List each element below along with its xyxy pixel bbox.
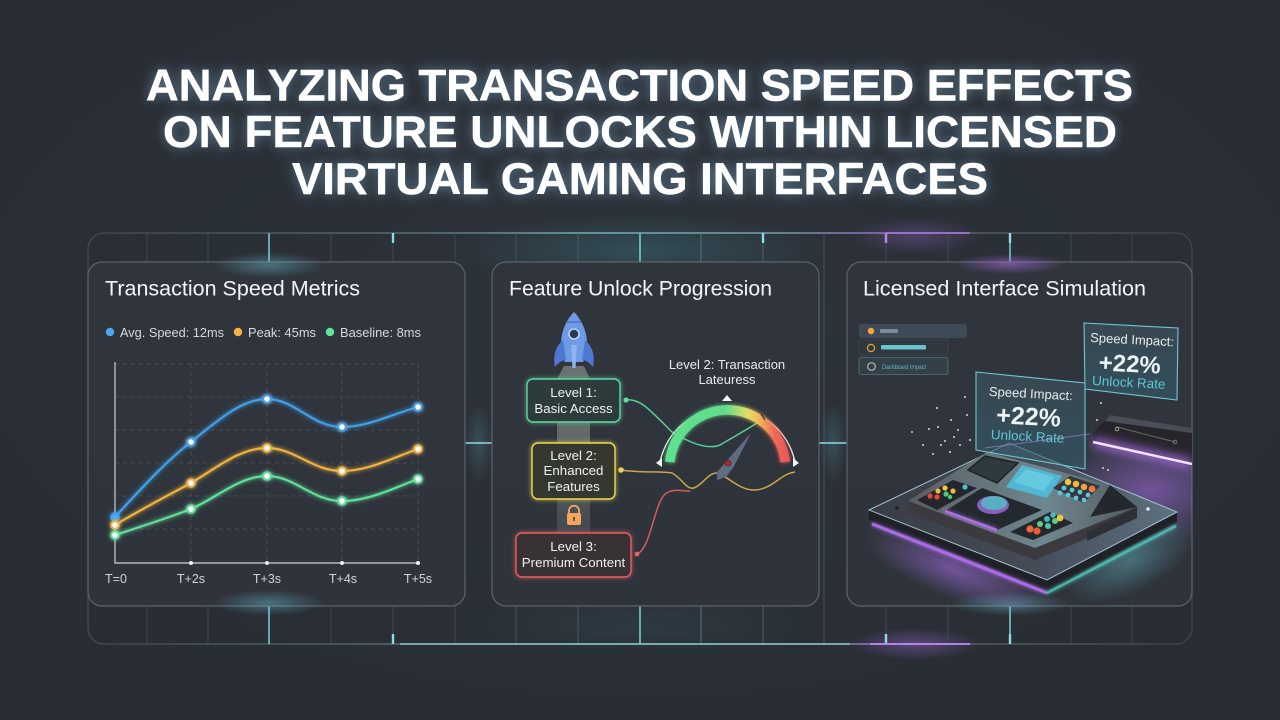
series: baseline: [111, 472, 422, 539]
lower button pad: [1010, 512, 1073, 540]
panel: feature unlock progression: [492, 262, 819, 606]
interface list: Dashboard Impact: [882, 364, 926, 371]
level 2 box: [532, 443, 615, 499]
connector: level 3 to gauge: [637, 490, 690, 554]
right keypad: [1053, 476, 1100, 503]
level 3 box: Level 3:: [550, 539, 597, 554]
x axis labels: T+3s: [253, 572, 281, 586]
gauge label: [669, 357, 785, 387]
level 1 box: [527, 379, 620, 422]
x axis labels: T=0: [105, 572, 127, 586]
holographic card rear: [1084, 323, 1178, 400]
title: ON FEATURE UNLOCKS WITHIN LICENSED: [163, 108, 1117, 157]
title: [146, 62, 1133, 204]
chart legend: Peak: 45ms: [248, 326, 316, 340]
chart legend: Baseline: 8ms: [340, 326, 421, 340]
line chart: [105, 362, 432, 586]
left button pad: [917, 480, 977, 510]
holographic card front: Unlock Rate: [990, 427, 1065, 446]
holographic card rear: Speed Impact:: [1090, 330, 1174, 349]
panel heading: simulation: Licensed Interface Simulation: [863, 278, 1146, 300]
base plate: [856, 510, 1054, 630]
device screens: [968, 456, 1018, 483]
x axis labels: T+4s: [329, 572, 357, 586]
circuit frame behind panels: [88, 215, 1192, 660]
x axis labels: T+2s: [177, 572, 205, 586]
level 1 box: Level 1:: [550, 385, 597, 400]
level 2 box: Features: [547, 479, 600, 494]
gauge label: Level 2: Transaction: [669, 357, 785, 372]
progress beam: [557, 366, 590, 532]
panel: licensed interface simulation: [846, 255, 1193, 614]
title: ANALYZING TRANSACTION SPEED EFFECTS: [146, 62, 1133, 110]
level 3 box: Premium Content: [522, 555, 626, 570]
connector: level 2 to gauge: [621, 470, 795, 490]
x axis labels: [105, 572, 432, 586]
particles: [911, 396, 1109, 471]
gauge label: Lateuress: [698, 372, 756, 387]
x axis labels: T+5s: [404, 572, 432, 586]
connector: level 1 to gauge: [626, 400, 757, 447]
series: peak: [111, 444, 422, 529]
trackpad and dial: [945, 488, 1042, 530]
level 2 box: Enhanced: [544, 463, 603, 478]
chart legend: Avg. Speed: 12ms: [120, 326, 224, 340]
chart legend: [106, 326, 421, 340]
gauge: [656, 395, 799, 480]
panel heading: progression: Feature Unlock Progression: [509, 278, 772, 300]
holographic card rear: Unlock Rate: [1092, 373, 1166, 392]
holographic card rear: +22%: [1098, 349, 1161, 380]
series: average speed: [111, 395, 422, 521]
purple neon bar: [1072, 415, 1192, 539]
console on base plate: [856, 443, 1207, 630]
holographic card front: Speed Impact:: [989, 384, 1073, 403]
title: VIRTUAL GAMING INTERFACES: [292, 155, 988, 204]
panel: transaction speed metrics: [88, 252, 465, 616]
icon: lock: [567, 506, 581, 525]
holographic card front: [976, 372, 1090, 469]
level 3 box: [516, 533, 631, 577]
level 2 box: Level 2:: [550, 448, 597, 463]
level 1 box: Basic Access: [534, 401, 613, 416]
panel heading: metrics: Transaction Speed Metrics: [105, 278, 360, 300]
icon: rocket: [554, 312, 594, 368]
interface list: [859, 324, 967, 374]
device body: [908, 501, 1137, 560]
holographic card front: +22%: [996, 401, 1062, 433]
